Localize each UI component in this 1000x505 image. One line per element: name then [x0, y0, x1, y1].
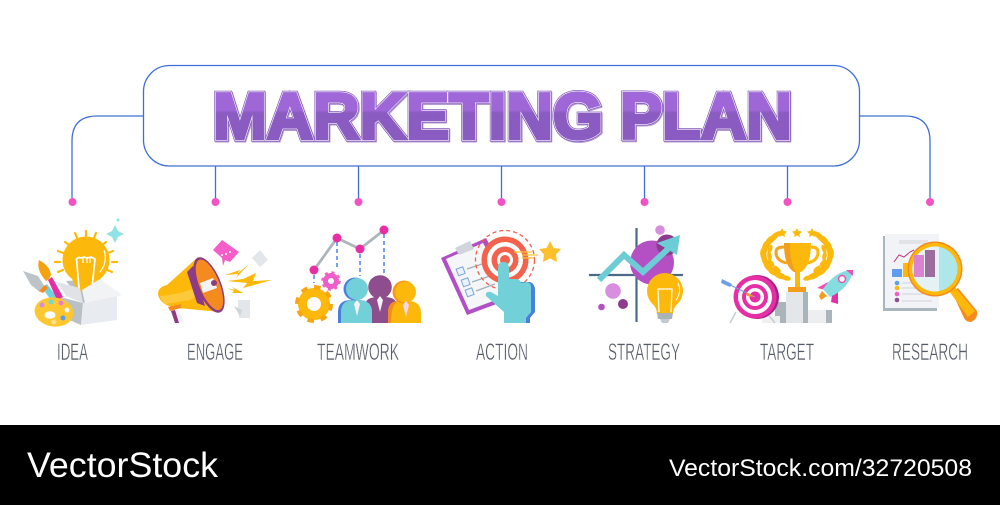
title: PLAN	[620, 80, 792, 152]
title: PLAN	[620, 80, 792, 152]
icon: strategy	[589, 225, 683, 323]
connector dots	[68, 198, 934, 206]
icon: engage	[158, 240, 272, 323]
label: teamwork: TEAMWORK	[317, 339, 399, 366]
icon: idea	[23, 218, 124, 329]
title: MARKETING	[213, 80, 603, 152]
box	[60, 297, 83, 325]
icon: research	[883, 234, 977, 322]
title: PLAN	[621, 80, 793, 154]
palette	[33, 295, 75, 329]
teal person	[338, 300, 372, 323]
icon: action	[441, 230, 561, 323]
title	[213, 80, 793, 154]
title: MARKETING	[213, 80, 603, 152]
label: idea: IDEA	[57, 339, 88, 366]
stars	[777, 228, 817, 237]
title panel	[144, 66, 860, 166]
yellow person	[388, 301, 421, 323]
laurel left	[760, 230, 791, 282]
label: action: ACTION	[476, 339, 528, 366]
pen	[23, 271, 45, 292]
footer bar	[0, 425, 1000, 505]
trophy	[776, 243, 818, 292]
title: MARKETING	[214, 80, 604, 154]
footer url: VectorStock.com/32720508	[669, 455, 972, 482]
label: strategy: STRATEGY	[608, 339, 680, 366]
sparkle	[106, 225, 124, 243]
title: PLAN	[620, 80, 792, 152]
label: target: TARGET	[760, 339, 814, 366]
icon: target	[721, 228, 853, 323]
connector lines	[72, 116, 930, 198]
footer logo: VectorStock	[27, 446, 219, 485]
icon: teamwork	[297, 226, 421, 323]
gears	[302, 292, 326, 316]
purple person	[365, 297, 397, 323]
title: MARKETING	[213, 80, 603, 152]
rocket	[817, 282, 828, 290]
brush	[48, 277, 63, 300]
label: engage: ENGAGE	[187, 339, 243, 366]
laurel right	[803, 230, 834, 282]
